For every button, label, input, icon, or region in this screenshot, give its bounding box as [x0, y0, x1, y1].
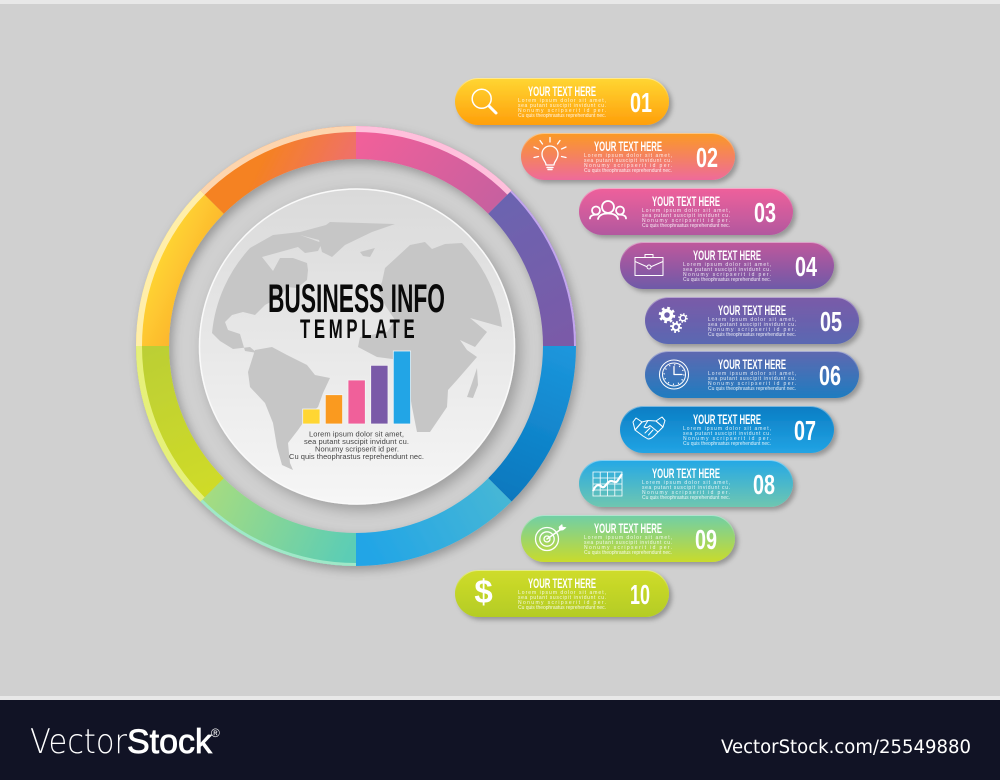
- logo: ®: [211, 726, 220, 740]
- body text: sea putant suscipit invidunt cu.: [642, 213, 730, 219]
- body text: [518, 98, 606, 119]
- pill 08: [579, 460, 793, 507]
- body text: Lorem ipsum dolor sit amet,: [683, 426, 771, 432]
- body text: Lorem ipsum dolor sit amet,: [584, 535, 672, 541]
- body text: [708, 317, 796, 338]
- body text: sea putant suscipit invidunt cu.: [584, 540, 672, 546]
- map: Madagascar: [467, 368, 478, 398]
- body text: Nonumy scripserit id per.: [708, 327, 796, 333]
- heading: YOUR TEXT HERE: [693, 247, 761, 263]
- body text: Cu quis theophrastus reprehendunt nec.: [708, 386, 796, 392]
- body text: Nonumy scripserit id per.: [683, 436, 771, 442]
- body text: Nonumy scripserit id per.: [584, 163, 672, 169]
- body text: Lorem ipsum dolor sit amet,: [708, 371, 796, 377]
- ring segment: blue: [488, 346, 576, 502]
- pill background: [455, 78, 669, 125]
- image id: VectorStock.com/25549880: [721, 736, 971, 758]
- number: 05: [820, 306, 842, 337]
- body text: Lorem ipsum dolor sit amet,: [642, 208, 730, 214]
- pill background: [579, 460, 793, 507]
- body text: sea putant suscipit invidunt cu.: [708, 376, 796, 382]
- number: 03: [754, 197, 776, 228]
- pill background: [620, 242, 834, 289]
- pill background: [521, 133, 735, 180]
- body text: [518, 590, 606, 611]
- ring segment: teal: [200, 478, 356, 566]
- map: Eurasia and Africa: [358, 242, 502, 432]
- body text: Cu quis theophrastus reprehendunt nec.: [642, 223, 730, 229]
- icon: light bulb: [534, 138, 566, 170]
- ring outer highlights: [139, 129, 575, 564]
- body text: Nonumy scripserit id per.: [642, 490, 730, 496]
- icon: gears: [660, 308, 687, 332]
- logo: [30, 722, 220, 762]
- world map: [212, 222, 502, 470]
- number: 08: [753, 469, 775, 500]
- body text: Lorem ipsum dolor sit amet,: [518, 98, 606, 104]
- body text: [708, 371, 796, 392]
- bar 3: [348, 380, 365, 424]
- body text: Cu quis theophrastus reprehendunt nec.: [683, 441, 771, 447]
- pill 04: [620, 242, 834, 289]
- logo: Stock: [127, 723, 213, 761]
- pill 06: [645, 351, 859, 398]
- ring segment: sky blue: [356, 478, 512, 566]
- center body text: Cu quis theophrastus reprehendunt nec.: [289, 452, 424, 461]
- body text: sea putant suscipit invidunt cu.: [683, 267, 771, 273]
- bar 1: [303, 409, 320, 424]
- icon: people: [590, 201, 626, 219]
- title: BUSINESS INFO: [268, 277, 445, 321]
- pill 02: [521, 133, 735, 180]
- icon: handshake: [633, 417, 665, 439]
- number: 09: [695, 524, 717, 555]
- body text: [642, 480, 730, 501]
- center body text: Lorem ipsum dolor sit amet,: [309, 430, 404, 438]
- body text: Nonumy scripserit id per.: [584, 545, 672, 551]
- body text: Cu quis theophrastus reprehendunt nec.: [584, 550, 672, 556]
- map: North America: [212, 222, 395, 353]
- center body text: Nonumy scripserit id per.: [315, 444, 399, 454]
- body text: [683, 426, 771, 447]
- body text: Nonumy scripserit id per.: [642, 218, 730, 224]
- body text: Cu quis theophrastus reprehendunt nec.: [518, 605, 606, 611]
- body text: Nonumy scripserit id per.: [683, 272, 771, 278]
- center body text: sea putant suscipit invidunt cu.: [304, 437, 409, 446]
- number: 04: [795, 251, 817, 282]
- ring segment: pink: [356, 126, 512, 214]
- body text: Nonumy scripserit id per.: [518, 108, 606, 114]
- ring segment: yellow: [136, 190, 224, 346]
- body text: Cu quis theophrastus reprehendunt nec.: [683, 277, 771, 283]
- heading: YOUR TEXT HERE: [718, 356, 786, 372]
- body text: sea putant suscipit invidunt cu.: [518, 103, 606, 109]
- icon: magnifier: [472, 89, 496, 113]
- body text: Cu quis theophrastus reprehendunt nec.: [584, 168, 672, 174]
- body text: [584, 535, 672, 556]
- icon: target: [536, 524, 566, 550]
- bar 5: [393, 351, 411, 424]
- bar 4: [371, 365, 388, 424]
- number: 02: [696, 142, 718, 173]
- heading: YOUR TEXT HERE: [718, 302, 786, 318]
- heading: YOUR TEXT HERE: [693, 411, 761, 427]
- icon: clock: [660, 360, 688, 389]
- heading: YOUR TEXT HERE: [652, 193, 720, 209]
- body text: Nonumy scripserit id per.: [708, 381, 796, 387]
- bar chart: [303, 351, 411, 424]
- heading: YOUR TEXT HERE: [594, 138, 662, 154]
- body text: Lorem ipsum dolor sit amet,: [584, 153, 672, 159]
- body text: sea putant suscipit invidunt cu.: [642, 485, 730, 491]
- icon: line chart: [593, 472, 622, 496]
- heading: YOUR TEXT HERE: [652, 465, 720, 481]
- pill 09: [521, 515, 735, 562]
- pill background: [645, 351, 859, 398]
- body text: [584, 153, 672, 174]
- subtitle: TEMPLATE: [300, 314, 415, 344]
- body text: Lorem ipsum dolor sit amet,: [708, 317, 796, 323]
- icon: dollar: $: [474, 573, 493, 610]
- pill background: [620, 406, 834, 453]
- pill background: [455, 570, 669, 617]
- center body text: [289, 430, 424, 461]
- number: 07: [794, 415, 816, 446]
- ring segment: purple: [488, 190, 576, 346]
- pill 10: [455, 570, 669, 617]
- logo: Vector: [30, 722, 127, 762]
- heading: YOUR TEXT HERE: [594, 520, 662, 536]
- body text: Lorem ipsum dolor sit amet,: [642, 480, 730, 486]
- heading: YOUR TEXT HERE: [528, 575, 596, 591]
- body text: sea putant suscipit invidunt cu.: [683, 431, 771, 437]
- footer band: [0, 700, 1000, 780]
- ring chart: [136, 126, 576, 566]
- center disc: [200, 189, 514, 504]
- pill 03: [579, 188, 793, 235]
- body text: sea putant suscipit invidunt cu.: [518, 595, 606, 601]
- heading: YOUR TEXT HERE: [528, 83, 596, 99]
- pill background: [645, 297, 859, 344]
- body text: Cu quis theophrastus reprehendunt nec.: [708, 332, 796, 338]
- body text: Lorem ipsum dolor sit amet,: [683, 262, 771, 268]
- pill background: [579, 188, 793, 235]
- number: 06: [819, 360, 841, 391]
- icon: briefcase: [635, 254, 663, 276]
- body text: Cu quis theophrastus reprehendunt nec.: [642, 495, 730, 501]
- number: 01: [630, 87, 652, 118]
- number: 10: [630, 579, 650, 610]
- map: Iceland: [360, 248, 375, 257]
- body text: Nonumy scripserit id per.: [518, 600, 606, 606]
- ring segment: orange: [200, 126, 356, 214]
- map: South America: [248, 347, 330, 470]
- body text: Lorem ipsum dolor sit amet,: [518, 590, 606, 596]
- pill 05: [645, 297, 859, 344]
- body text: sea putant suscipit invidunt cu.: [584, 158, 672, 164]
- body text: [683, 262, 771, 283]
- ring segment: lime: [136, 346, 224, 502]
- bar 2: [325, 395, 343, 424]
- body text: sea putant suscipit invidunt cu.: [708, 322, 796, 328]
- body text: Cu quis theophrastus reprehendunt nec.: [518, 113, 606, 119]
- pill 01: [455, 78, 669, 125]
- pill 07: [620, 406, 834, 453]
- body text: [642, 208, 730, 229]
- pill background: [521, 515, 735, 562]
